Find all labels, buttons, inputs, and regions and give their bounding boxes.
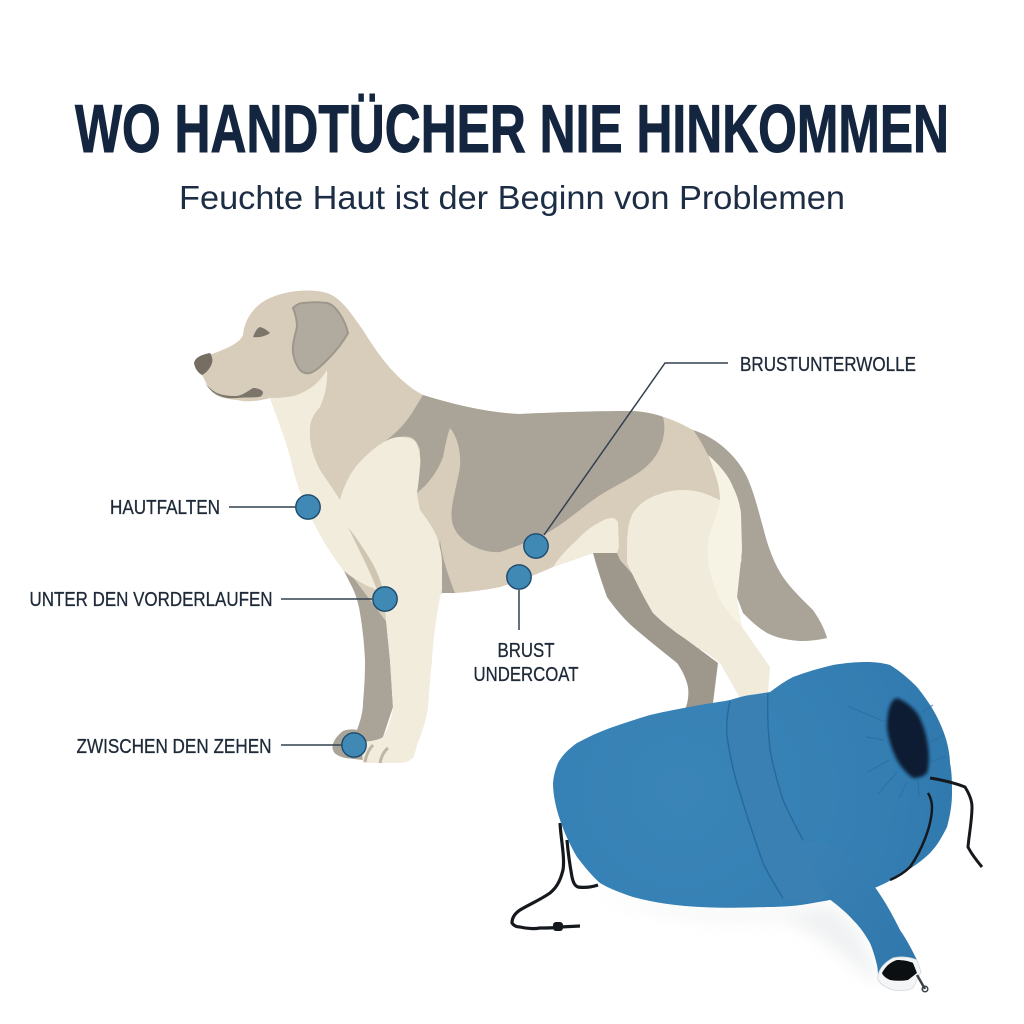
dog toe lines xyxy=(365,745,388,763)
dog belly patch xyxy=(553,518,619,567)
callout: Unter den Vorderlaufen: UNTER DEN VORDERLAUFEN xyxy=(30,589,272,611)
bag hose opening xyxy=(878,957,928,992)
dog body xyxy=(194,291,742,650)
dog far hind leg xyxy=(593,553,718,710)
bag collar band xyxy=(727,693,827,903)
bag gathers xyxy=(848,705,946,798)
illustration: blue drying bag xyxy=(512,662,982,992)
dog neck, shoulder and front leg xyxy=(270,370,442,763)
callout: Zwischen den Zehen: ZWISCHEN DEN ZEHEN xyxy=(76,736,272,758)
dog shoulder crease xyxy=(348,527,383,590)
dog eye xyxy=(253,327,270,337)
bag hose xyxy=(803,842,920,980)
callout: Hautfalten xyxy=(110,495,320,519)
bag opening xyxy=(887,698,929,778)
dog tail xyxy=(693,430,827,641)
dog mouth xyxy=(205,383,263,398)
callout: Brustunterwolle: BRUSTUNTERWOLLE xyxy=(740,354,916,376)
bag drawstring right xyxy=(890,778,982,880)
dog hind leg light patch xyxy=(708,455,742,627)
subtitle: Feuchte Haut ist der Beginn von Problemen xyxy=(179,179,845,216)
dog far front leg xyxy=(332,567,393,760)
callout: Brust Undercoat xyxy=(474,565,578,686)
bag ground shadow xyxy=(600,890,880,985)
dog grey saddle xyxy=(377,395,664,552)
illustration: dog xyxy=(194,291,827,763)
dog hind leg xyxy=(627,490,770,698)
dog chest fold xyxy=(437,540,455,593)
callout: Zwischen den Zehen xyxy=(76,733,366,758)
dog nose xyxy=(194,353,212,375)
callout: Brust Undercoat: UNDERCOAT xyxy=(474,664,578,686)
callout: Hautfalten: HAUTFALTEN xyxy=(110,497,220,519)
dog ear xyxy=(293,302,348,373)
bag drawstring left xyxy=(512,823,598,931)
callout: Brust Undercoat: BRUST xyxy=(498,640,554,662)
bag body xyxy=(553,662,952,908)
callout: Brustunterwolle xyxy=(524,354,916,558)
